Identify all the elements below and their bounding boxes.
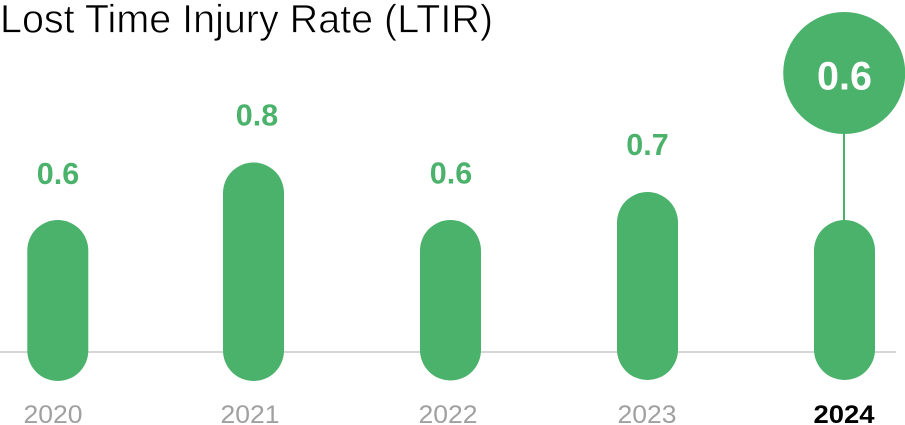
- year labels: [24, 401, 875, 425]
- bar: 2020: 0.6: [37, 157, 79, 191]
- bar: 2021: [223, 98, 284, 381]
- bar: 2023: [617, 128, 678, 380]
- bar: 2022: [420, 156, 481, 380]
- bar: 2022: 0.6: [430, 156, 472, 190]
- callout: 2024 value: 0.6: [817, 54, 872, 98]
- bar: 2023: 0.7: [626, 128, 669, 162]
- callout: 2024 value: [783, 12, 905, 222]
- bar: 2020: [27, 157, 88, 381]
- bar: 2021: 0.8: [236, 98, 278, 132]
- bar: 2024: [814, 220, 875, 380]
